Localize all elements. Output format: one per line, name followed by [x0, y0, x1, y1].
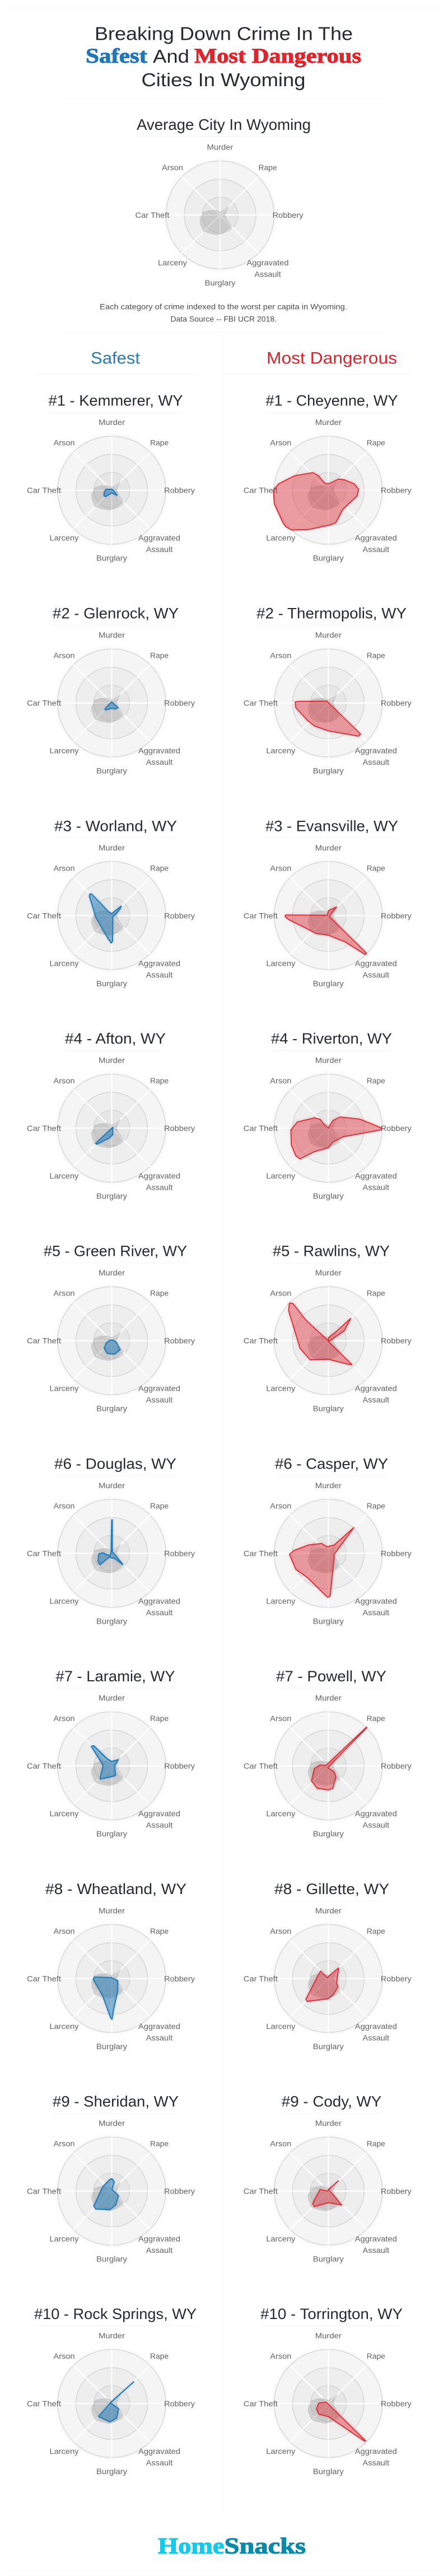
radar chart: Murder: [99, 418, 125, 427]
radar chart: Murder: [315, 1693, 342, 1702]
radar chart: Aggravated: [355, 1596, 397, 1605]
radar chart: average city: Burglary: [204, 278, 236, 287]
radar chart: Burglary: [96, 1191, 127, 1200]
radar chart: Aggravated: [355, 1384, 397, 1393]
radar chart: Assault: [363, 545, 389, 554]
radar chart: Aggravated: [138, 959, 180, 967]
radar chart: Assault: [146, 1608, 172, 1617]
radar chart: Robbery: [164, 2399, 195, 2408]
radar chart: Burglary: [96, 979, 127, 988]
radar chart: Murder: [99, 1906, 125, 1915]
radar chart: Rape: [367, 1714, 385, 1723]
radar chart: Rape: [150, 2139, 169, 2148]
radar chart: [27, 1056, 195, 1200]
radar chart: Robbery: [381, 699, 412, 708]
radar chart: Arson: [270, 1289, 291, 1298]
radar chart: Murder: [99, 630, 125, 639]
radar chart: Assault: [363, 1821, 389, 1830]
radar chart: Assault: [146, 2458, 172, 2467]
radar chart: Rape: [150, 1289, 169, 1298]
city title: #8 - Gillette, WY: [274, 1881, 389, 1897]
city title: #6 - Casper, WY: [275, 1455, 388, 1472]
radar chart: Burglary: [313, 2467, 344, 2476]
radar chart: Aggravated: [355, 1171, 397, 1180]
panel: #7 Laramie: [27, 1668, 195, 1838]
radar chart: Rape: [367, 1076, 385, 1085]
radar chart: Robbery: [164, 699, 195, 708]
radar chart: Car Theft: [244, 911, 278, 920]
radar chart: Arson: [270, 1501, 291, 1510]
radar chart: Larceny: [266, 1809, 295, 1818]
radar chart: [27, 843, 195, 988]
radar chart: Larceny: [49, 746, 78, 755]
radar chart: Larceny: [49, 534, 78, 543]
radar chart: Larceny: [49, 1171, 78, 1180]
radar chart: Rape: [150, 863, 169, 872]
title: Breaking Down Crime In The: [95, 24, 353, 44]
radar chart: Murder: [315, 1056, 342, 1065]
radar chart: Assault: [146, 1182, 172, 1191]
radar chart: Robbery: [381, 486, 412, 495]
radar chart: Murder: [99, 2331, 125, 2340]
radar chart: Aggravated: [355, 2447, 397, 2456]
radar chart: Assault: [146, 970, 172, 979]
radar chart: Larceny: [49, 1809, 78, 1818]
radar chart: Assault: [146, 1395, 172, 1404]
radar chart: Burglary: [313, 554, 344, 563]
radar chart: [244, 630, 412, 775]
radar chart: [27, 2119, 195, 2263]
radar chart: Assault: [363, 2033, 389, 2042]
radar chart: Burglary: [96, 2254, 127, 2263]
radar chart: Robbery: [164, 1761, 195, 1770]
radar chart: Murder: [99, 2119, 125, 2128]
radar chart: Burglary: [96, 554, 127, 563]
radar chart: Assault: [363, 1182, 389, 1191]
radar chart: average city: Larceny: [158, 258, 187, 267]
city title: #3 - Worland, WY: [54, 817, 177, 834]
radar chart: [27, 1906, 195, 2051]
radar chart: Rape: [367, 1927, 385, 1935]
city title: #5 - Rawlins, WY: [273, 1243, 390, 1260]
panel: #2 Glenrock: [27, 605, 195, 775]
radar chart: Robbery: [164, 1124, 195, 1133]
radar chart: Murder: [315, 418, 342, 427]
radar chart: Aggravated: [138, 1596, 180, 1605]
radar chart: [27, 630, 195, 775]
radar chart: [27, 1481, 195, 1625]
panel: #10 Rock Springs: [27, 2306, 197, 2476]
radar chart: Rape: [367, 863, 385, 872]
radar chart: Aggravated: [355, 2022, 397, 2031]
radar chart: Robbery: [164, 2187, 195, 2196]
radar chart: Aggravated: [138, 1809, 180, 1818]
city title: #9 - Cody, WY: [282, 2093, 381, 2110]
radar chart: Arson: [54, 1927, 75, 1935]
radar chart: Arson: [270, 2351, 291, 2360]
city title: #4 - Afton, WY: [65, 1030, 166, 1047]
radar chart: [27, 418, 195, 563]
radar chart: Larceny: [266, 1596, 295, 1605]
panel: #9 Cody: [244, 2093, 412, 2263]
radar chart: Larceny: [266, 2234, 295, 2243]
radar chart: Arson: [54, 1501, 75, 1510]
logo: HomeSnacks: Home: [158, 2533, 224, 2559]
radar chart: Aggravated: [355, 1809, 397, 1818]
panel: #6 Casper: [244, 1455, 412, 1625]
radar chart: Car Theft: [244, 2399, 278, 2408]
radar chart: Aggravated: [355, 534, 397, 543]
panel: #1 Kemmerer: [27, 392, 195, 563]
radar chart: Larceny: [266, 1171, 295, 1180]
radar chart: Burglary: [96, 1829, 127, 1838]
radar chart: Murder: [315, 843, 342, 852]
radar chart: Larceny: [266, 534, 295, 543]
radar chart: Rape: [367, 2139, 385, 2148]
panel: #10 Torrington: [244, 2306, 412, 2476]
radar chart: Arson: [270, 438, 291, 447]
radar chart: Aggravated: [138, 2234, 180, 2243]
radar chart: Burglary: [96, 2467, 127, 2476]
radar chart: Arson: [270, 1076, 291, 1085]
radar chart: [244, 843, 412, 988]
radar chart: Car Theft: [27, 2187, 61, 2196]
radar chart: Burglary: [313, 1616, 344, 1625]
title: Safest: [86, 45, 148, 68]
radar chart: [244, 1693, 412, 1838]
title: And: [153, 46, 189, 67]
radar chart: Car Theft: [244, 699, 278, 708]
radar chart: Robbery: [381, 1124, 412, 1133]
radar chart: Larceny: [266, 1384, 295, 1393]
radar chart: Assault: [146, 758, 172, 766]
radar chart: Larceny: [49, 959, 78, 967]
radar chart: Car Theft: [244, 1761, 278, 1770]
radar chart: Car Theft: [27, 1549, 61, 1558]
city title: #1 - Kemmerer, WY: [48, 392, 183, 409]
radar chart: Larceny: [49, 2447, 78, 2456]
radar chart: Aggravated: [355, 2234, 397, 2243]
radar chart: Robbery: [381, 911, 412, 920]
heading: most dangerous column: Most Dangerous: [267, 349, 397, 367]
radar chart: Aggravated: [138, 2447, 180, 2456]
radar chart: Burglary: [96, 1616, 127, 1625]
radar chart: Burglary: [313, 979, 344, 988]
radar chart: Aggravated: [138, 2022, 180, 2031]
radar chart: Murder: [315, 1268, 342, 1277]
radar chart: Larceny: [266, 2022, 295, 2031]
radar chart: [244, 1481, 412, 1625]
radar chart: Arson: [54, 2351, 75, 2360]
radar chart: Car Theft: [244, 1336, 278, 1345]
radar chart: Assault: [363, 2458, 389, 2467]
radar chart: Rape: [150, 438, 169, 447]
radar chart: [244, 1268, 412, 1413]
radar chart: Aggravated: [355, 959, 397, 967]
radar chart: Aggravated: [138, 1171, 180, 1180]
radar chart: Arson: [54, 1714, 75, 1723]
radar chart: [27, 1268, 195, 1413]
radar chart: Arson: [270, 651, 291, 660]
radar chart: average city: Rape: [259, 163, 277, 172]
radar chart: Arson: [270, 1927, 291, 1935]
panel: #4 Afton: [27, 1030, 195, 1200]
heading: safest column: Safest: [91, 349, 141, 367]
radar chart: [244, 418, 412, 563]
radar chart: Murder: [315, 1906, 342, 1915]
city title: #5 - Green River, WY: [44, 1243, 187, 1260]
radar chart: Arson: [54, 2139, 75, 2148]
city title: #10 - Rock Springs, WY: [34, 2306, 197, 2322]
radar chart: Larceny: [49, 1384, 78, 1393]
radar chart: Car Theft: [27, 1124, 61, 1133]
radar chart: Aggravated: [355, 746, 397, 755]
city title: #7 - Laramie, WY: [56, 1668, 175, 1685]
radar chart: Burglary: [313, 2254, 344, 2263]
title: [86, 24, 361, 90]
logo: HomeSnacks: Snacks: [224, 2533, 306, 2559]
radar chart: Assault: [363, 1395, 389, 1404]
radar chart: Car Theft: [27, 2399, 61, 2408]
city title: #8 - Wheatland, WY: [45, 1881, 186, 1897]
radar chart: Robbery: [164, 1549, 195, 1558]
title: Most Dangerous: [194, 45, 361, 68]
title: Cities In Wyoming: [141, 69, 306, 90]
radar chart: Robbery: [164, 911, 195, 920]
data source note: [100, 302, 347, 324]
radar chart: Car Theft: [27, 1336, 61, 1345]
radar chart: Burglary: [96, 1404, 127, 1413]
radar chart: Assault: [146, 545, 172, 554]
radar chart: Robbery: [381, 2399, 412, 2408]
city title: #6 - Douglas, WY: [54, 1455, 176, 1472]
radar chart: Rape: [367, 651, 385, 660]
radar chart: Rape: [367, 438, 385, 447]
radar chart: [244, 2119, 412, 2263]
radar chart: Assault: [146, 1821, 172, 1830]
radar chart: average city: Arson: [162, 163, 183, 172]
radar chart: Murder: [99, 1268, 125, 1277]
radar chart: average city: Assault: [254, 270, 281, 279]
radar chart: average city: [136, 142, 304, 287]
radar chart: Car Theft: [27, 699, 61, 708]
radar chart: Robbery: [381, 1336, 412, 1345]
panel: #8 Gillette: [244, 1881, 412, 2051]
radar chart: average city: Car Theft: [136, 211, 170, 219]
radar chart: Robbery: [381, 1761, 412, 1770]
logo: HomeSnacks: [158, 2533, 306, 2559]
radar chart: Aggravated: [138, 1384, 180, 1393]
radar chart: Murder: [315, 2119, 342, 2128]
radar chart: [27, 2331, 195, 2476]
radar chart: Car Theft: [27, 486, 61, 495]
radar chart: average city: Murder: [207, 142, 234, 151]
radar chart: Robbery: [381, 1549, 412, 1558]
radar chart: Larceny: [266, 959, 295, 967]
radar chart: Rape: [367, 2351, 385, 2360]
radar chart: Burglary: [313, 1829, 344, 1838]
radar chart: Murder: [99, 843, 125, 852]
radar chart: Arson: [54, 1289, 75, 1298]
radar chart: Rape: [367, 1501, 385, 1510]
data source note: Data Source -- FBI UCR 2018.: [170, 315, 277, 324]
radar chart: Burglary: [313, 766, 344, 775]
radar chart: [244, 2331, 412, 2476]
panel: #4 Riverton: [244, 1030, 412, 1200]
radar chart: Burglary: [313, 1191, 344, 1200]
panel: #5 Rawlins: [244, 1243, 412, 1413]
radar chart: Murder: [315, 2331, 342, 2340]
panel: #6 Douglas: [27, 1455, 195, 1625]
radar chart: Car Theft: [244, 1549, 278, 1558]
radar chart: Car Theft: [27, 1761, 61, 1770]
radar chart: Rape: [150, 1927, 169, 1935]
radar chart: Rape: [367, 1289, 385, 1298]
data source note: Each category of crime indexed to the worst per capita in Wyoming.: [100, 302, 347, 311]
city title: #4 - Riverton, WY: [271, 1030, 392, 1047]
radar chart: Arson: [270, 1714, 291, 1723]
radar chart: Car Theft: [244, 2187, 278, 2196]
radar chart: Arson: [54, 1076, 75, 1085]
panel: #5 Green River: [27, 1243, 195, 1413]
city title: #10 - Torrington, WY: [260, 2306, 403, 2322]
city title: #1 - Cheyenne, WY: [265, 392, 398, 409]
radar chart: [244, 1906, 412, 2051]
radar chart: Larceny: [49, 2234, 78, 2243]
radar chart: Car Theft: [27, 911, 61, 920]
radar chart: Burglary: [96, 2042, 127, 2051]
radar chart: Burglary: [313, 2042, 344, 2051]
radar chart: [244, 1056, 412, 1200]
radar chart: average city: Aggravated: [246, 258, 289, 267]
radar chart: Larceny: [266, 2447, 295, 2456]
radar chart: Murder: [99, 1481, 125, 1490]
radar chart: Car Theft: [244, 1974, 278, 1983]
city title: #3 - Evansville, WY: [265, 817, 398, 834]
city title: #7 - Powell, WY: [276, 1668, 386, 1685]
radar chart: Robbery: [164, 1336, 195, 1345]
radar chart: Burglary: [96, 766, 127, 775]
radar chart: Car Theft: [244, 1124, 278, 1133]
radar chart: Larceny: [266, 746, 295, 755]
panel: average city: [100, 116, 347, 324]
city title: #2 - Glenrock, WY: [53, 605, 179, 622]
radar chart: Rape: [150, 1501, 169, 1510]
radar chart: Assault: [146, 2246, 172, 2255]
radar chart: Robbery: [164, 486, 195, 495]
radar chart: Assault: [363, 970, 389, 979]
radar chart: Assault: [363, 758, 389, 766]
radar chart: Robbery: [164, 1974, 195, 1983]
radar chart: Arson: [54, 863, 75, 872]
radar chart: Aggravated: [138, 534, 180, 543]
radar chart: Robbery: [381, 1974, 412, 1983]
radar chart: Murder: [99, 1693, 125, 1702]
radar chart: Assault: [363, 2246, 389, 2255]
radar chart: Assault: [146, 2033, 172, 2042]
radar chart: Larceny: [49, 1596, 78, 1605]
city title: #9 - Sheridan, WY: [53, 2093, 179, 2110]
panel: #7 Powell: [244, 1668, 412, 1838]
radar chart: Arson: [270, 863, 291, 872]
radar chart: Rape: [150, 651, 169, 660]
radar chart: Murder: [99, 1056, 125, 1065]
radar chart: Rape: [150, 1714, 169, 1723]
radar chart: Arson: [270, 2139, 291, 2148]
radar chart: Robbery: [381, 2187, 412, 2196]
radar chart: Burglary: [313, 1404, 344, 1413]
radar chart: Rape: [150, 1076, 169, 1085]
radar chart: Car Theft: [244, 486, 278, 495]
radar chart: Rape: [150, 2351, 169, 2360]
radar chart: Arson: [54, 651, 75, 660]
radar chart: Aggravated: [138, 746, 180, 755]
city title: #2 - Thermopolis, WY: [256, 605, 407, 622]
panel: #8 Wheatland: [27, 1881, 195, 2051]
panel: #3 Worland: [27, 817, 195, 988]
radar chart: average city: Robbery: [272, 211, 304, 219]
radar chart: Arson: [54, 438, 75, 447]
panel: #2 Thermopolis: [244, 605, 412, 775]
radar chart: Murder: [315, 1481, 342, 1490]
panel: #1 Cheyenne: [244, 392, 412, 563]
radar chart: Assault: [363, 1608, 389, 1617]
heading: average city: Average City In Wyoming: [137, 116, 311, 133]
radar chart: [27, 1693, 195, 1838]
panel: #9 Sheridan: [27, 2093, 195, 2263]
panel: #3 Evansville: [244, 817, 412, 988]
radar chart: Car Theft: [27, 1974, 61, 1983]
radar chart: Murder: [315, 630, 342, 639]
radar chart: Larceny: [49, 2022, 78, 2031]
